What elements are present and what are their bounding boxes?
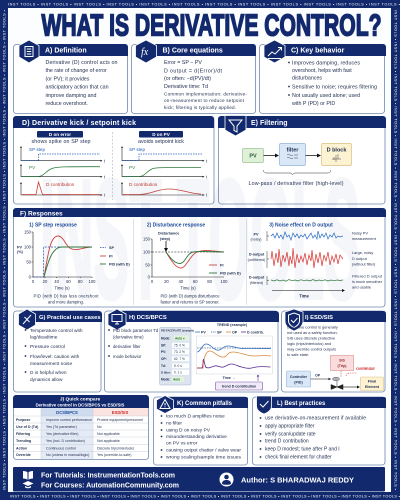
chart: SP step response: 50 [26, 260, 32, 264]
panel: J quick compare table: Derivative control in DCS/BPCS vs ESD/SIS [36, 402, 125, 407]
panel: K common pitfalls: misunderstanding derivative [166, 434, 227, 440]
panel: J quick compare table: ESD/SIS [112, 410, 128, 415]
chart: noise effect: (noisy) [250, 238, 262, 242]
footer banner: For Courses: AutomationCommunity.com [41, 482, 179, 490]
faceplate: 0. 1 s [174, 370, 182, 374]
panel: K common pitfalls: no filter [166, 421, 182, 427]
chart: noise effect: D-output [249, 276, 265, 280]
panel: I ESD/SIS: not used as a safety function; [287, 330, 338, 335]
panel: E filtering: E) Filtering [251, 120, 288, 127]
panel: J quick compare table: Override [16, 453, 31, 457]
panel: L best practices: use derivative-on-measurement if available [265, 416, 366, 422]
faceplate: Mode: [161, 336, 170, 340]
panel: J quick compare table: Not applicable [97, 439, 120, 443]
panel: H DCS/BPCS: H) DCS/BPCS [129, 315, 167, 321]
chart: D on PV: SP step [129, 147, 145, 152]
panel: J quick compare table [13, 395, 149, 460]
panel: A definition: Derivative (D) control acts on [46, 60, 118, 66]
panel: I ESD/SIS: to safe state. [287, 352, 309, 357]
panel: J quick compare table: Action [16, 446, 27, 450]
panel: B core equations: kick; filtering is typically applied. [164, 105, 236, 110]
chart: noise effect [248, 222, 383, 298]
panel: K common pitfalls: too much D amplifies noise [166, 414, 225, 420]
panel: J quick compare table: Purpose [16, 418, 30, 422]
chart: disturbance response: 20 [164, 279, 169, 284]
panel: K common pitfalls: wrong scaling/sample time issues [166, 455, 242, 461]
chart: disturbance response: PID (with D) [220, 272, 241, 276]
chart: SP step response: 20 [43, 279, 48, 284]
panel: J quick compare table: Use of D (Td) [16, 425, 39, 429]
page frame: INST TOOLS • INST TOOLS • INST TOOLS • INST TOOLS • INST TOOLS • INST TOOLS • INST TOOLS • INST TOOLS • INST TOOLS • INST TOOLS • INST TOOLS • INST TOOLS • INST TOOLS • [10, 494, 400, 498]
panel: D derivative kick: D on PV [152, 132, 171, 137]
panel: G practical use cases: lag/deadtime [30, 334, 58, 340]
trend chart: D contrib. [247, 330, 264, 334]
panel: J quick compare table: Discrete trips/interlocks [97, 446, 134, 450]
chart: D on error: t [104, 192, 106, 198]
panel: A definition: improve damping and [46, 93, 96, 99]
diagram: SIS override: SIS [339, 358, 345, 362]
panel: C key behavior [260, 40, 386, 114]
chart: disturbance response: Disturbance [158, 232, 179, 236]
chart: noise effect: D-output [249, 252, 265, 256]
panel: J quick compare table: Improve control performance [46, 418, 92, 422]
faceplate: PV: [161, 350, 166, 354]
panel: G practical use cases: D is helpful when [30, 370, 67, 376]
chart: D on error: t [104, 158, 106, 163]
chart: SP step response: SP [109, 246, 114, 250]
panel: J quick compare table: No (unless in manual/logic) [46, 453, 89, 457]
PV block: PV [249, 154, 257, 160]
chart: D on error: t [104, 174, 106, 179]
chart: noise effect: PV [254, 232, 259, 236]
panel: D derivative kick: D) Derivative kick / setpoint kick [22, 120, 136, 127]
callout: trend D contribution [216, 382, 262, 390]
chart: disturbance response: 60 [193, 279, 198, 284]
chart: SP step response: PID (with D) has less overshoot [34, 294, 99, 298]
chart: SP step response: (%) [17, 250, 24, 254]
panel: L best practices: keep D modest; tune after P and I [265, 447, 340, 453]
chart: disturbance response: 2) Disturbance response [147, 222, 205, 228]
icon: book [23, 471, 33, 480]
D block: D block [327, 148, 347, 154]
D block [322, 144, 352, 166]
arrows [264, 154, 318, 156]
panel: E filtering: Low-pass / derivative filter (high-level) [248, 181, 344, 187]
chart: SP step response: 80 [78, 279, 83, 284]
chart: noise effect: is much smoother [352, 279, 383, 284]
faceplate: OP: [161, 357, 167, 361]
panel: G practical use cases: Flow/level: caution with [30, 354, 80, 360]
panel: J quick compare table: Yes (derivative filter) [46, 432, 78, 436]
panel: C key behavior: Sensitive to noise; requires filtering [292, 84, 377, 90]
chart: noise effect: (without filter) [352, 262, 376, 266]
panel: H DCS/BPCS: PID block parameter Td [113, 328, 159, 333]
panel: F responses [13, 208, 386, 307]
panel: I ESD/SIS: I) ESD/SIS [305, 315, 333, 321]
chart: disturbance response: 0 [148, 274, 151, 280]
chart: SP step response [17, 222, 130, 304]
panel: H DCS/BPCS: (derivative time) [113, 334, 144, 340]
chart: disturbance response: 0 [151, 279, 154, 284]
diagram: SIS override: Final [368, 380, 376, 384]
chart: disturbance response: 80 [207, 279, 213, 284]
footer banner [13, 467, 385, 492]
panel: L best practices: trend D contribution [265, 439, 309, 445]
panel: J quick compare table: Filtering [16, 432, 30, 436]
panel: C key behavior: Improves damping, reduces [292, 60, 360, 66]
chart: disturbance response: (step) [160, 237, 171, 241]
panel: I ESD/SIS: may override control outputs [287, 346, 336, 351]
panel: C key behavior: C) Key behavior [291, 48, 345, 54]
panel: A definition: (or PV); it provides [46, 76, 90, 82]
chart: disturbance response: 100 [143, 250, 151, 254]
faceplate: Mode: [161, 378, 170, 382]
panel: G practical use cases [14, 309, 102, 392]
chart: noise effect: and usable [352, 284, 371, 290]
faceplate: 73. 2 % [174, 350, 185, 354]
chart: SP step response: Time (s) [54, 286, 70, 290]
panel: L best practices: apply appropriate filter [265, 424, 315, 430]
footer banner: For Tutorials: InstrumentationTools.com [41, 472, 175, 480]
panel: J quick compare table: Yes (incl. D contribution) [46, 439, 85, 443]
chart: disturbance response: 100 [220, 279, 228, 284]
chart: disturbance response: Time (s) [180, 286, 196, 290]
chart: disturbance response: 40 [178, 279, 184, 284]
chart: D on error: D contribution [46, 182, 75, 187]
panel: J quick compare table: DCS/BPCS [56, 410, 78, 415]
chart: disturbance response: PID (with D) damps disturbance [160, 294, 220, 298]
panel: B core equations: Error = SP − PV [164, 60, 202, 66]
panel: L best practices: L) Best practices [277, 401, 326, 407]
chart: SP step response: and more damping. [48, 300, 84, 304]
chart: disturbance response: faster and returns to SP sooner. [160, 300, 220, 304]
chart: noise effect: (filtered) [250, 281, 263, 285]
panel: C key behavior: with P (PD) or PID [292, 101, 335, 107]
panel: J quick compare table: No [97, 425, 102, 429]
faceplate: PID FACEPLATE (example) [161, 328, 194, 332]
panel: G practical use cases: measurement noise [30, 361, 72, 367]
filter block: filter [287, 148, 299, 154]
chart: noise effect: (unfiltered) [248, 258, 265, 262]
panel: B core equations [132, 40, 256, 114]
faceplate: Auto ▾ [175, 336, 185, 340]
trend chart: PV [201, 330, 206, 334]
chart: SP step response: PID (with D) [109, 262, 130, 266]
panel: G practical use cases: Pressure control [30, 344, 65, 350]
page frame: INST TOOLS • INST TOOLS • INST TOOLS • INST TOOLS • INST TOOLS • INST TOOLS • INST TOOLS • INST TOOLS • INST TOOLS • INST TOOLS • INST TOOLS • INST TOOLS • INST TOOLS • INST TOOLS • INST TOOLS • [393, 10, 397, 491]
panel: D derivative kick: shows spike on SP step [32, 139, 91, 145]
diagram: SIS override: (Trip) [338, 364, 347, 368]
chart: D on PV [121, 146, 208, 198]
panel: K common pitfalls: on PV vs error [166, 441, 198, 447]
filter block [280, 144, 306, 166]
diagram: SIS override: OVERRIDE [356, 367, 375, 371]
chart: SP step response: 100 [24, 244, 32, 250]
faceplate [160, 328, 194, 385]
chart: noise effect: Noisy PV [352, 230, 368, 236]
page frame: INST TOOLS • INST TOOLS • INST TOOLS • INST TOOLS • INST TOOLS • INST TOOLS • INST TOOLS • INST TOOLS • INST TOOLS • INST TOOLS • INST TOOLS • INST TOOLS • INST TOOLS • INST TOOLS • INST TOOLS • [2, 9, 6, 490]
panel: J quick compare table: J) Quick compare [60, 396, 100, 402]
panel: K common pitfalls: causing output chatter / valve wear [166, 448, 241, 454]
panel: G practical use cases: G) Practical use cases [39, 315, 101, 321]
chart: disturbance response: 50 [145, 262, 151, 268]
panel: D derivative kick [13, 116, 214, 204]
chart: D on error: SP step [29, 147, 45, 152]
chart: D on PV: t [206, 192, 208, 198]
panel: B core equations: fx [141, 47, 149, 58]
chart: SP step response: 40 [54, 279, 60, 284]
faceplate: 75. 0 % [174, 344, 185, 348]
chart: D on PV: PV [129, 165, 136, 170]
diagram: SIS override [286, 356, 384, 390]
chart: noise effect: D output [352, 256, 368, 261]
panel: C key behavior: Not usually used alone; used [292, 93, 360, 99]
chart: SP step response: PI [109, 254, 112, 258]
panel: A definition: reduce overshoot. [46, 101, 88, 107]
chart: SP step response: PV [17, 246, 22, 250]
panel: I ESD/SIS: Derivative control is generally [287, 324, 338, 330]
panel: J quick compare table: Protect equipment/personnel [97, 418, 143, 422]
chart: disturbance response: 150 [143, 236, 151, 242]
panel: A definition: A) Definition [45, 48, 87, 54]
panel: K common pitfalls: using D on noisy PV [166, 428, 211, 434]
trend chart: OP [232, 330, 238, 334]
panel: I ESD/SIS: SIS uses discrete protective [287, 336, 335, 340]
panel: B core equations: (or often: −d(PV)/dt) [164, 76, 211, 82]
faceplate: SP: [161, 344, 166, 348]
panel: K common pitfalls: K) Common pitfalls [177, 401, 233, 407]
panel: G practical use cases: Temperature control with [30, 328, 83, 334]
icon: graduation cap [22, 481, 34, 488]
panel: B core equations: D output = d(Error)/dt [164, 68, 223, 74]
panel: A definition: the rate of change of error [46, 68, 107, 74]
chart: noise effect: Time [299, 294, 310, 298]
panel: D derivative kick: avoids setpoint kick [138, 139, 184, 145]
chart: noise effect: 3) Noise effect on D output [269, 222, 333, 228]
panel: H DCS/BPCS [104, 309, 279, 392]
panel: J quick compare table: Not applicable [97, 432, 120, 436]
panel: G practical use cases: dynamics allow [30, 377, 63, 383]
panel: J quick compare table: Yes (override-to-safe) [97, 453, 131, 457]
chart: D on error [20, 146, 106, 198]
panel: L best practices [252, 396, 386, 465]
panel: F responses: F) Responses [20, 210, 63, 217]
trend chart [195, 323, 272, 381]
panel: D derivative kick: D on error [49, 132, 71, 137]
panel: I ESD/SIS [282, 309, 386, 392]
chart: SP step response: 0 [29, 274, 32, 280]
chart: SP step response: 150 [24, 230, 32, 234]
faceplate: 62. 7 % [174, 357, 185, 361]
faceplate: D filter: [161, 370, 171, 374]
callout: trend D contribution: trend D contribution [222, 384, 256, 388]
chart: D on PV: t [206, 174, 208, 179]
footer banner: Author: S BHARADWAJ REDDY [241, 476, 354, 484]
faceplate: Auto [173, 378, 180, 382]
panel: K common pitfalls [154, 396, 248, 465]
icon: author [220, 472, 234, 486]
panel: L best practices: check final element for chatter [265, 455, 332, 461]
chart: noise effect: measurement [352, 236, 377, 241]
PV block [242, 148, 264, 162]
panel: I ESD/SIS: logic (trips/interlocks) and [287, 341, 331, 346]
chart: D on PV: D contribution [129, 182, 158, 187]
chart: D on error: PV [29, 165, 36, 170]
chart: SP step response: 60 [66, 279, 71, 284]
diagram: SIS override: Controller [290, 375, 308, 379]
page frame: INST TOOLS • INST TOOLS • INST TOOLS • INST TOOLS • INST TOOLS • INST TOOLS • INST TOOLS • INST TOOLS • INST TOOLS • INST TOOLS • INST TOOLS • INST TOOLS • [8, 3, 400, 7]
chart: SP step response: 1) SP step response [29, 222, 77, 228]
trend chart: Time → [223, 376, 235, 380]
chart: D on PV: t [206, 158, 208, 163]
chart: noise effect: Filtered D output [352, 274, 383, 278]
panel: C key behavior: disturbances [292, 76, 322, 82]
panel: H DCS/BPCS: mode behavior [113, 354, 142, 359]
panel: B core equations: Derivative time: Td [164, 84, 208, 90]
trend chart: SP [217, 330, 222, 334]
panel: C key behavior: overshoot, helps with fast [292, 68, 352, 74]
panel: A definition [14, 40, 128, 114]
diagram: SIS override: Element [365, 385, 380, 389]
panel: H DCS/BPCS: derivative filter [113, 344, 141, 349]
chart: disturbance response [143, 222, 241, 304]
panel: A definition: anticipatory action that can [46, 84, 109, 90]
panel: L best practices: verify scan/update rate [265, 432, 316, 438]
chart: SP step response: 0 [32, 279, 35, 284]
panel: B core equations: Common implementation: derivative- [164, 92, 247, 96]
panel: J quick compare table: Trending [16, 439, 31, 443]
diagram: SIS override: OP [315, 374, 321, 378]
panel: B core equations: B) Core equations [162, 48, 223, 54]
panel: B core equations: on-measurement to reduce setpoint [164, 98, 245, 103]
panel: J quick compare table: Continuous control [46, 446, 76, 450]
faceplate: Td: [161, 364, 166, 368]
chart: SP step response: 100 [88, 279, 96, 284]
panel: E filtering [218, 116, 386, 204]
panel: J quick compare table: Yes (Td parameter) [46, 425, 77, 429]
faceplate: 5. 0 s [174, 364, 182, 368]
chart: disturbance response: PI [220, 264, 223, 268]
chart: noise effect: Large, noisy [352, 250, 373, 255]
diagram: SIS override: (PID) [294, 380, 303, 384]
trend chart: TREND (example) [217, 323, 248, 327]
